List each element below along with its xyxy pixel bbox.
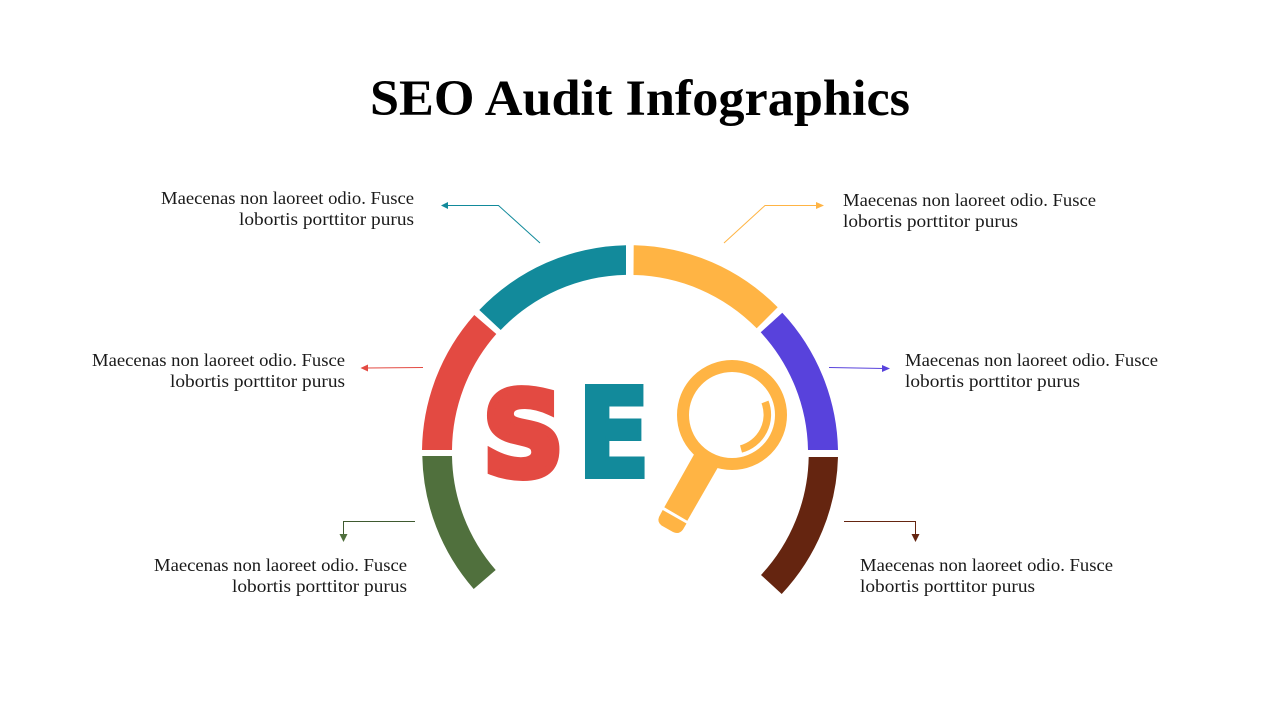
callout: red middle left: lobortis porttitor purus xyxy=(170,371,345,391)
letter S: S xyxy=(483,368,564,503)
segment: purple xyxy=(761,313,838,450)
callout: green bottom left xyxy=(154,522,415,596)
segment: green xyxy=(422,456,496,589)
callout: purple middle right: lobortis porttitor purus xyxy=(905,371,1080,391)
callout: red middle left xyxy=(92,350,423,391)
callout: green bottom left: Maecenas non laoreet odio. Fusce xyxy=(154,555,407,575)
callout: teal top left: Maecenas non laoreet odio. Fusce xyxy=(161,188,414,208)
callout: purple middle right: Maecenas non laoreet odio. Fusce xyxy=(905,350,1158,370)
callout: teal top left xyxy=(161,188,540,243)
letter E: E xyxy=(577,363,650,506)
segment: yellow xyxy=(634,245,778,328)
segment: teal xyxy=(479,245,626,330)
callout: yellow top right: Maecenas non laoreet odio. Fusce xyxy=(843,190,1096,210)
segment: brown xyxy=(761,457,838,594)
callout: green bottom left: lobortis porttitor purus xyxy=(232,576,407,596)
callout: brown bottom right: lobortis porttitor purus xyxy=(860,576,1035,596)
callout: purple middle right xyxy=(829,350,1158,391)
callout: red middle left: Maecenas non laoreet odio. Fusce xyxy=(92,350,345,370)
segment: red xyxy=(422,315,496,450)
callout: teal top left: lobortis porttitor purus xyxy=(239,209,414,229)
callout: yellow top right xyxy=(724,190,1096,243)
gauge ring xyxy=(422,245,838,594)
callout: yellow top right: lobortis porttitor purus xyxy=(843,211,1018,231)
title: SEO Audit Infographics xyxy=(370,71,910,127)
icon: magnifying glass xyxy=(658,366,781,533)
callout: brown bottom right: Maecenas non laoreet odio. Fusce xyxy=(860,555,1113,575)
callout: brown bottom right xyxy=(844,522,1113,596)
